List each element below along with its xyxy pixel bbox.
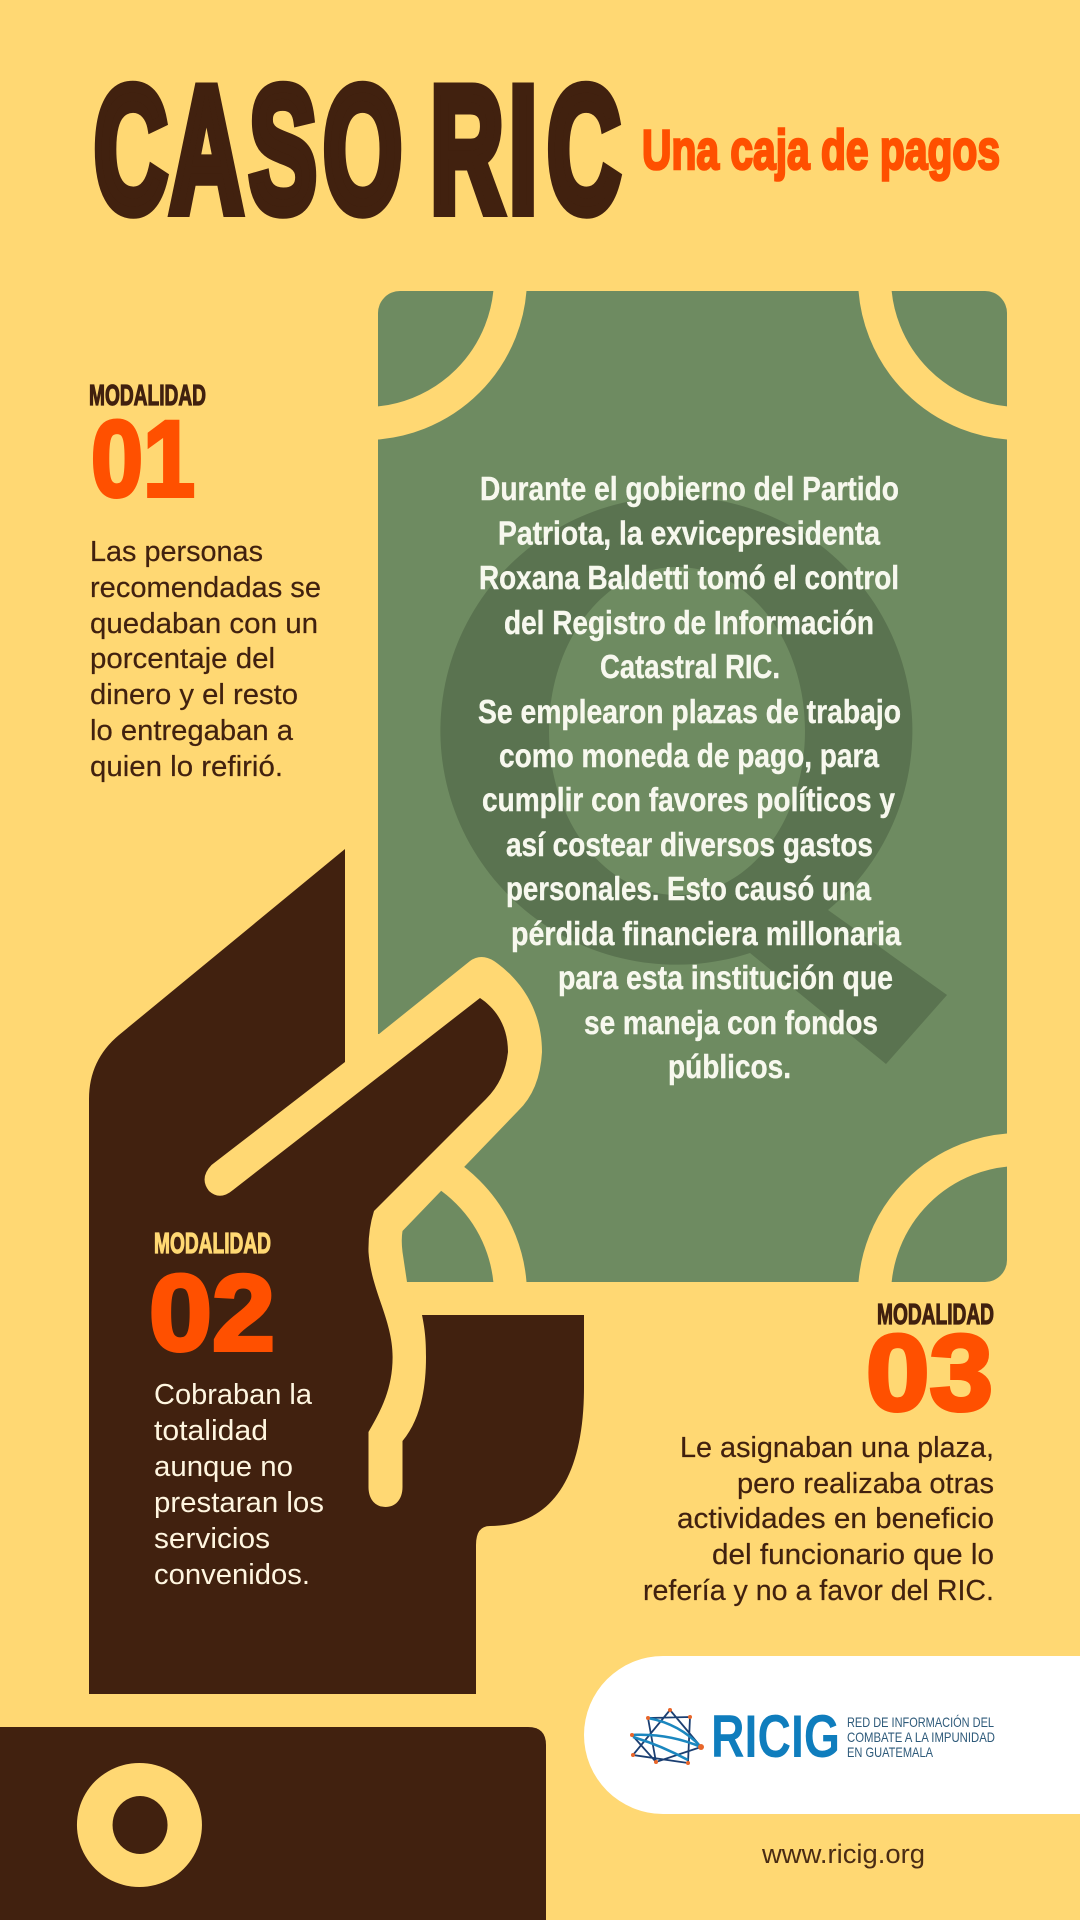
panel: modalidad 01: quedaban con un [90, 608, 318, 640]
text block: summary: personales. Esto causó una [506, 870, 872, 907]
logo tagline: COMBATE A LA IMPUNIDAD [847, 1729, 995, 1745]
panel: modalidad 03: refería y no a favor del RIC. [643, 1575, 994, 1607]
panel: modalidad 02: convenidos. [154, 1559, 310, 1591]
text block: summary [478, 470, 902, 1085]
panel: modalidad 01 [89, 380, 321, 783]
panel: modalidad 03: actividades en beneficio [677, 1503, 994, 1535]
text block: summary: Se emplearon plazas de trabajo [478, 693, 901, 730]
text block: summary: cumplir con favores políticos y [482, 781, 896, 818]
panel: modalidad 03 [643, 1299, 994, 1607]
text block: summary: del Registro de Información [504, 604, 874, 641]
panel: modalidad 01: quien lo refirió. [90, 751, 283, 783]
panel: modalidad 02: servicios [154, 1523, 270, 1555]
text block: summary: Durante el gobierno del Partido [480, 470, 899, 507]
text block: summary: públicos. [668, 1048, 791, 1085]
panel: modalidad 01: 01 [91, 398, 195, 519]
icon: RICIG star logo [630, 1708, 704, 1765]
panel: modalidad 03: del funcionario que lo [712, 1539, 994, 1571]
panel: modalidad 02: Cobraban la [154, 1379, 313, 1411]
panel: modalidad 02 [149, 1228, 324, 1591]
icon: coin ring [77, 1763, 202, 1887]
logo tagline: RED DE INFORMACIÓN DEL [847, 1714, 994, 1730]
panel: modalidad 03: 03 [866, 1312, 993, 1433]
panel: logo pill [584, 1656, 1080, 1814]
panel: modalidad 03: Le asignaban una plaza, [680, 1432, 994, 1464]
panel: modalidad 03: MODALIDAD [877, 1299, 994, 1331]
text block: summary: Roxana Baldetti tomó el control [479, 559, 899, 596]
panel: modalidad 01: porcentaje del [90, 643, 275, 675]
panel: modalidad 02: prestaran los [154, 1487, 324, 1519]
logo tagline: EN GUATEMALA [847, 1744, 934, 1760]
panel: banknote [378, 291, 1007, 1282]
text block: summary: pérdida financiera millonaria [511, 915, 902, 952]
website url: www.ricig.org [761, 1839, 925, 1869]
banknote corner arcs [378, 291, 1007, 1282]
hand outline [340, 957, 542, 1320]
panel: modalidad 02: aunque no [154, 1451, 293, 1483]
logo wordmark: RICIG [711, 1703, 840, 1770]
panel: modalidad 01: lo entregaban a [90, 715, 294, 747]
panel: modalidad 02: 02 [149, 1252, 275, 1373]
text block: summary: Patriota, la exvicepresidenta [498, 514, 881, 552]
hand silhouette [89, 849, 584, 1694]
text block: summary: así costear diversos gastos [506, 826, 873, 863]
panel: bottom banknote strip [0, 1727, 546, 1920]
panel: modalidad 01: recomendadas se [90, 572, 321, 604]
logo tagline [847, 1714, 995, 1760]
icon: hand holding banknote [89, 849, 584, 1694]
icon: letter Q watermark [440, 497, 947, 1064]
panel: modalidad 01: dinero y el resto [90, 679, 298, 711]
text block: summary: como moneda de pago, para [499, 737, 880, 774]
panel: modalidad 01: MODALIDAD [89, 380, 206, 412]
panel: modalidad 03: pero realizaba otras [737, 1468, 994, 1500]
panel: modalidad 02: MODALIDAD [154, 1228, 271, 1260]
text block: summary: para esta institución que [558, 959, 893, 996]
panel: modalidad 01: Las personas [90, 536, 263, 568]
text block: summary: Catastral RIC. [600, 648, 780, 685]
panel: modalidad 02: totalidad [154, 1415, 268, 1447]
title: CASO RIC [94, 50, 620, 249]
text block: summary: se maneja con fondos [584, 1004, 878, 1041]
